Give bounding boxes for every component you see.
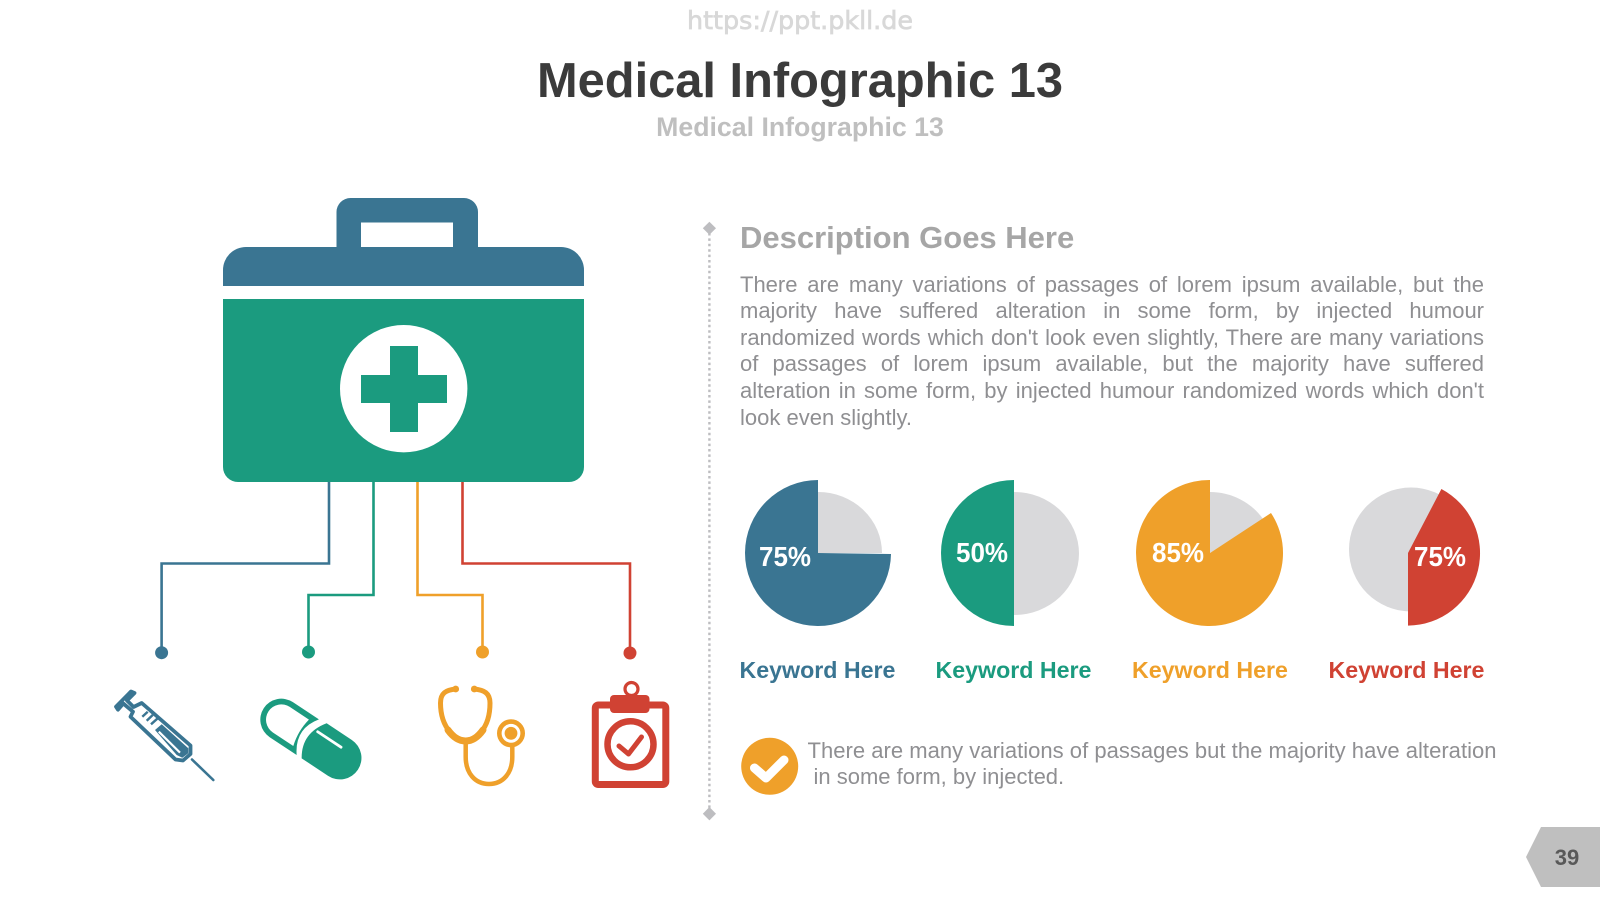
icon: stethoscope — [440, 686, 523, 784]
subtitle: Medical Infographic 13 — [656, 112, 944, 142]
icon: capsule pill — [252, 690, 370, 788]
pie chart: teal 50% — [941, 480, 1079, 626]
divider line with diamonds — [703, 222, 716, 820]
title: Medical Infographic 13 — [537, 54, 1063, 108]
pie chart: orange 85% — [1136, 480, 1283, 626]
pie chart: red 75% — [1349, 488, 1480, 626]
description paragraph: majority have suffered alteration in some form, by injected humour — [740, 298, 1484, 323]
heading: description: Description Goes Here — [740, 220, 1074, 255]
connector: teal to pill — [302, 482, 374, 658]
connector: blue to syringe — [155, 482, 329, 659]
page number tag: 39 — [1555, 845, 1579, 870]
pie chart: blue 75%: 75% — [759, 541, 811, 572]
description paragraph: alteration in some form, by injected humour randomized words which don't — [740, 378, 1484, 403]
description paragraph: There are many variations of passages of lorem ipsum available, but the — [740, 272, 1484, 296]
description paragraph: look even slightly. — [740, 405, 912, 430]
connector: orange to stethoscope — [418, 482, 489, 658]
pie chart: orange 85%: 85% — [1152, 537, 1204, 568]
label: keyword orange: Keyword Here — [1132, 657, 1288, 683]
connector: red to clipboard — [462, 482, 636, 660]
icon: clipboard with check — [595, 682, 666, 784]
label: keyword teal: Keyword Here — [936, 657, 1092, 683]
note text: There are many variations of passages but the majority have alteration — [808, 738, 1496, 763]
icon: medical briefcase — [223, 198, 584, 482]
icon: orange check badge — [741, 738, 798, 795]
pie chart: red 75%: 75% — [1414, 541, 1466, 572]
watermark url: https://ppt.pkll.de — [687, 6, 913, 35]
description paragraph — [740, 272, 1484, 430]
note text: in some form, by injected. — [814, 764, 1064, 789]
icon: syringe — [116, 692, 213, 780]
description paragraph: of passages of lorem ipsum available, but the majority have suffered — [740, 351, 1484, 376]
label: keyword blue: Keyword Here — [740, 657, 896, 683]
description paragraph: randomized words which don't look even slightly, There are many variations — [740, 325, 1484, 350]
label: keyword red: Keyword Here — [1328, 657, 1485, 683]
pie chart: blue 75% — [745, 480, 891, 626]
page number tag — [1526, 827, 1600, 887]
pie chart: teal 50%: 50% — [956, 537, 1008, 568]
